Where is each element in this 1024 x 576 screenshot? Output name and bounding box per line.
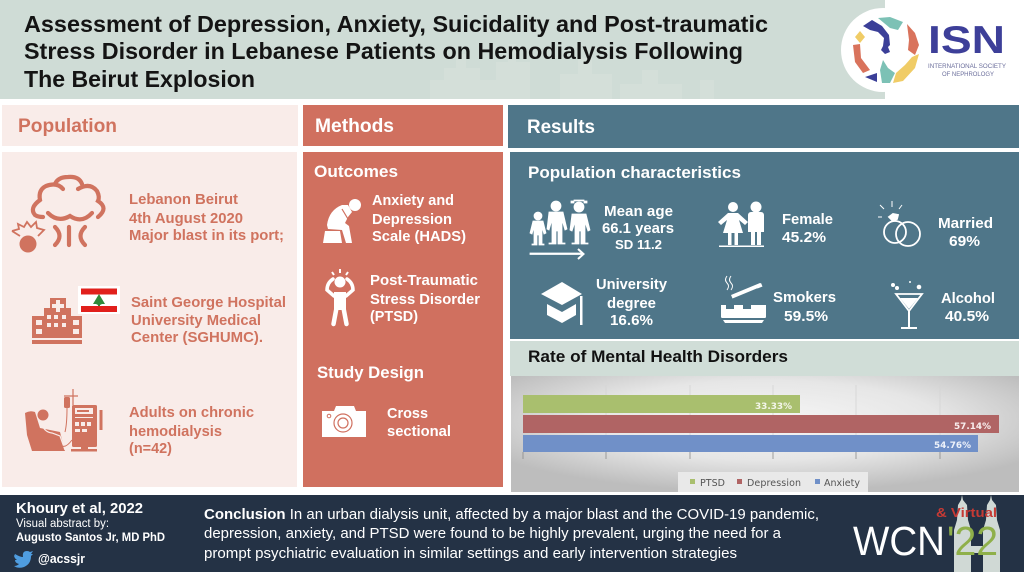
title: Stress Disorder in Lebanese Patients on Hemodialysis Following xyxy=(24,38,743,64)
PTSD text: Post-Traumatic xyxy=(370,272,478,289)
bar chart xyxy=(511,376,1019,492)
icon: depressed person xyxy=(323,199,361,243)
footer xyxy=(0,495,1024,572)
study design text: Cross xyxy=(387,405,428,422)
university text xyxy=(596,276,668,329)
icon: camera xyxy=(322,406,366,437)
results heading: Results xyxy=(527,117,595,138)
female text: Female xyxy=(782,211,833,228)
icon: stressed person xyxy=(327,269,353,324)
population heading: Population xyxy=(18,116,117,137)
mean age text: Mean age xyxy=(604,203,673,220)
bar: PTSD: 33.33% xyxy=(755,402,792,412)
study design text: sectional xyxy=(387,423,451,440)
alcohol text: Alcohol xyxy=(941,290,995,307)
hospital text xyxy=(131,294,286,346)
university text: degree xyxy=(607,295,656,312)
icon: couple xyxy=(718,202,764,247)
characteristics heading: Population characteristics xyxy=(528,164,741,182)
credits: Khoury et al, 2022 xyxy=(16,501,143,517)
dialysis text: Adults on chronic xyxy=(129,404,254,421)
title xyxy=(24,11,768,92)
icon: explosion xyxy=(12,177,104,252)
icon: ashtray xyxy=(721,276,766,323)
icon: hemodialysis xyxy=(25,389,101,452)
title: Assessment of Depression, Anxiety, Suicidality and Post-traumatic xyxy=(24,11,768,37)
ISN logo: ISN xyxy=(928,19,1005,62)
ISN logo: INTERNATIONAL SOCIETY xyxy=(928,63,1007,70)
icon: Lebanese flag xyxy=(78,286,120,314)
ISN logo: OF NEPHROLOGY xyxy=(942,71,995,78)
ISN logo xyxy=(841,8,1007,92)
chart legend: Depression xyxy=(747,478,801,489)
HADS text xyxy=(372,192,466,245)
HADS text: Anxiety and xyxy=(372,192,454,209)
bar: depression xyxy=(523,415,999,433)
icon: rings xyxy=(878,201,920,246)
study design heading: Study Design xyxy=(317,364,424,382)
bar: anxiety: 54.76% xyxy=(934,441,971,451)
female text: 45.2% xyxy=(782,229,826,246)
population heading xyxy=(2,105,298,146)
conclusion text xyxy=(204,507,819,562)
icon: twitter bird xyxy=(14,551,33,568)
chart legend: Anxiety xyxy=(824,478,860,489)
credits: @acssjr xyxy=(38,552,85,566)
WCN 22 logo: WCN xyxy=(853,518,945,564)
results heading xyxy=(508,105,1019,148)
bar: anxiety xyxy=(523,435,978,452)
hospital text: Center (SGHUMC). xyxy=(131,329,263,346)
chart legend: PTSD xyxy=(700,478,725,489)
panel: population characteristics xyxy=(510,152,1019,339)
WCN 22 logo xyxy=(853,495,1000,572)
study design text xyxy=(387,405,451,440)
panel: methods xyxy=(303,105,503,487)
credits xyxy=(16,501,165,566)
WCN 22 logo: & Virtual xyxy=(936,505,997,520)
outcomes heading: Outcomes xyxy=(314,163,398,181)
PTSD text: (PTSD) xyxy=(370,308,418,325)
married text: 69% xyxy=(949,233,980,250)
alcohol text: 40.5% xyxy=(945,308,989,325)
PTSD text xyxy=(370,272,480,325)
WCN 22 logo: '22 xyxy=(947,518,998,564)
HADS text: Depression xyxy=(372,211,452,228)
title: The Beirut Explosion xyxy=(24,66,255,92)
methods heading xyxy=(303,105,503,146)
hospital text: Saint George Hospital xyxy=(131,294,286,311)
blast text: 4th August 2020 xyxy=(129,210,243,227)
dialysis text xyxy=(129,404,254,457)
mean age text: 66.1 years xyxy=(602,220,674,237)
married text: Married xyxy=(938,215,993,232)
smokers text xyxy=(773,289,836,325)
credits: Visual abstract by: xyxy=(16,518,109,530)
header banner xyxy=(0,0,885,99)
female text xyxy=(782,211,833,246)
dialysis text: (n=42) xyxy=(129,440,172,457)
HADS text: Scale (HADS) xyxy=(372,228,466,245)
mean age text xyxy=(602,203,674,252)
icon: hospital xyxy=(32,298,82,344)
icon: martini xyxy=(891,281,922,328)
smokers text: 59.5% xyxy=(784,308,828,325)
PTSD text: Stress Disorder xyxy=(370,291,480,308)
blast text xyxy=(129,191,284,244)
methods heading: Methods xyxy=(315,116,394,137)
university text: University xyxy=(596,276,668,293)
blast text: Major blast in its port; xyxy=(129,227,284,244)
conclusion text: Conclusion In an urban dialysis unit, affected by a major blast and the COVID-19 pandemic, xyxy=(204,507,819,523)
conclusion text: depression, anxiety, and PTSD were found to be highly prevalent, urging the need for a xyxy=(204,526,782,542)
bar: PTSD xyxy=(523,395,800,413)
dialysis text: hemodialysis xyxy=(129,423,222,440)
icon: graduation cap xyxy=(541,282,582,325)
credits: Augusto Santos Jr, MD PhD xyxy=(16,530,165,544)
married text xyxy=(938,215,993,250)
chart legend xyxy=(678,472,868,492)
icon: age groups xyxy=(530,200,590,259)
panel: results xyxy=(508,105,1019,492)
blast text: Lebanon Beirut xyxy=(129,191,238,208)
panel: population xyxy=(2,105,298,487)
mean age text: SD 11.2 xyxy=(615,237,662,252)
alcohol text xyxy=(941,290,995,325)
hospital text: University Medical xyxy=(131,312,261,329)
smokers text: Smokers xyxy=(773,289,836,306)
rate heading: Rate of Mental Health Disorders xyxy=(528,347,788,366)
conclusion text: prompt psychiatric evaluation in similar settings and early intervention strategies xyxy=(204,546,737,562)
bar: depression: 57.14% xyxy=(954,422,991,432)
university text: 16.6% xyxy=(610,312,653,329)
rate heading xyxy=(510,341,1019,376)
